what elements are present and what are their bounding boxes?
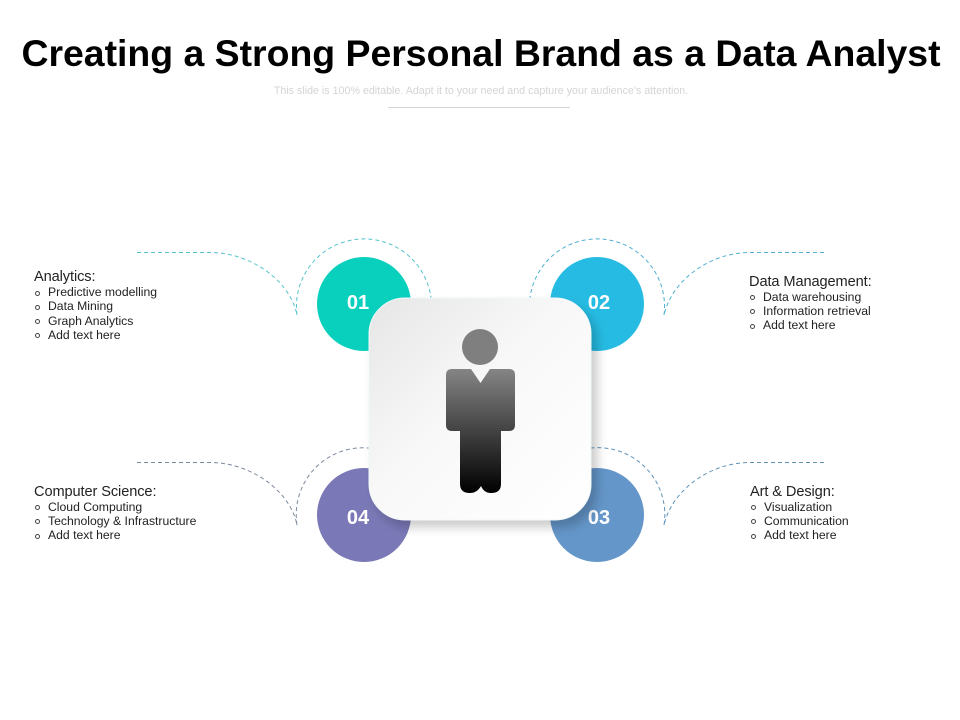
text block: data management: Add text here xyxy=(763,318,836,332)
center card xyxy=(369,298,591,520)
text block: computer science: Cloud Computing xyxy=(48,500,142,514)
circle 04: 04 xyxy=(347,507,370,529)
text block: computer science xyxy=(34,484,196,542)
text block: data management xyxy=(749,274,872,332)
circle 03: 03 xyxy=(588,507,610,529)
text block: analytics: Graph Analytics xyxy=(48,314,133,328)
dashed connector: data management xyxy=(530,239,824,315)
text block: art and design: Communication xyxy=(764,514,849,528)
icon: person xyxy=(446,329,515,493)
text block: analytics xyxy=(34,269,157,342)
text block: analytics: Analytics: xyxy=(34,269,95,285)
text block: data management: Data Management: xyxy=(749,274,872,290)
text block: art and design: Visualization xyxy=(764,500,832,514)
text block: data management: Data warehousing xyxy=(763,290,861,304)
text block: analytics: Data Mining xyxy=(48,299,113,313)
dashed connector: analytics xyxy=(137,239,431,315)
text block: data management: Information retrieval xyxy=(763,304,871,318)
circle 01 xyxy=(317,257,411,351)
text block: analytics: Add text here xyxy=(48,328,120,342)
text block: art and design xyxy=(750,484,849,542)
circle 01: 01 xyxy=(347,292,369,314)
text block: computer science: Technology & Infrastructure xyxy=(48,514,196,528)
dashed connector: computer science xyxy=(137,448,369,525)
circle 02 xyxy=(550,257,644,351)
subtitle: This slide is 100% editable. Adapt it to your need and capture your audience's attention. xyxy=(274,85,688,97)
text block: computer science: Add text here xyxy=(48,528,120,542)
text block: computer science: Computer Science: xyxy=(34,484,156,500)
circle 03 xyxy=(550,468,644,562)
circle 02: 02 xyxy=(588,292,610,314)
dashed connector: art and design xyxy=(591,448,824,525)
subtitle underline xyxy=(388,107,570,108)
text block: art and design: Art & Design: xyxy=(750,484,835,500)
text block: art and design: Add text here xyxy=(764,528,836,542)
circle 04 xyxy=(317,468,411,562)
title: Creating a Strong Personal Brand as a Data Analyst xyxy=(21,32,941,74)
text block: analytics: Predictive modelling xyxy=(48,285,157,299)
